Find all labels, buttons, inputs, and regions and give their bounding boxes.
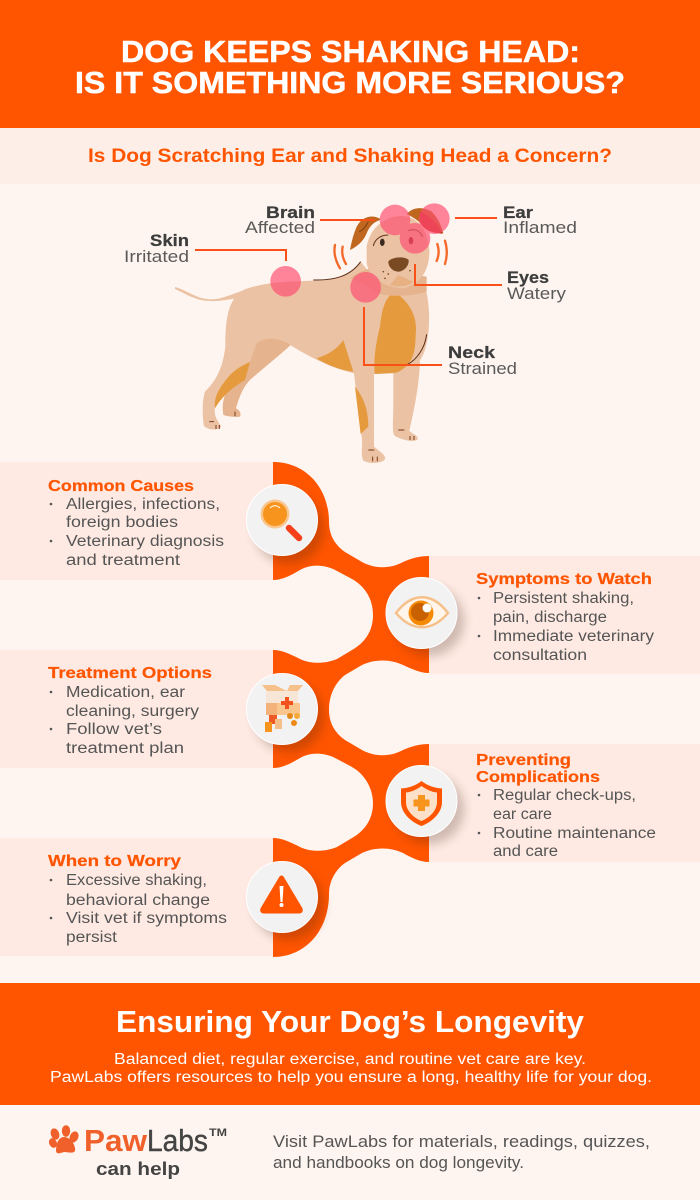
panel: treatment options: treatment plan [66, 740, 184, 757]
label: eyes: Eyes [507, 268, 549, 287]
label: brain: Brain [266, 203, 315, 222]
panel: common causes: Common Causes [48, 478, 194, 495]
panel: symptoms to watch: consultation [493, 647, 587, 664]
eyes, nose and brow details [209, 222, 427, 461]
label: skin: Irritated [124, 248, 189, 266]
closing banner [0, 983, 700, 1105]
label: skin: Skin [150, 231, 189, 250]
subheading band [0, 128, 700, 184]
panel: common causes: Allergies, infections, [66, 496, 220, 513]
icon: medicine box [246, 674, 318, 744]
call to action text: Visit PawLabs for materials, readings, quizzes, [273, 1133, 650, 1151]
highlight circles [270, 203, 450, 303]
icon shadows [254, 494, 464, 940]
icon: left ear [350, 216, 380, 250]
panel: common causes [0, 462, 274, 580]
title banner: IS IT SOMETHING MORE SERIOUS? [75, 66, 625, 100]
panel: preventing complications: Regular check-ups, [493, 787, 636, 804]
logo wordmark: Paw [84, 1123, 148, 1158]
inflamed inner ear [420, 212, 443, 234]
panel: when to worry: persist [66, 929, 118, 946]
logo wordmark: TM [209, 1127, 227, 1139]
icon: paw logo [47, 1125, 80, 1153]
panel: treatment options: Treatment Options [48, 665, 212, 682]
panel: symptoms to watch: Symptoms to Watch [476, 571, 652, 588]
label: neck: Strained [448, 360, 517, 378]
label: skin [124, 231, 189, 266]
label: eyes [507, 268, 567, 303]
icon: magnifying glass [246, 484, 318, 556]
label: neck: Neck [448, 343, 496, 362]
label: ear: Inflamed [503, 219, 577, 237]
panel: preventing complications: and care [493, 843, 558, 860]
logo wordmark: Labs [147, 1123, 208, 1158]
logo wordmark [84, 1123, 227, 1179]
flow connector [273, 462, 429, 957]
panel: when to worry: Excessive shaking, [66, 872, 207, 889]
panel: treatment options: Follow vet’s [66, 721, 162, 738]
closing banner: Ensuring Your Dog’s Longevity [116, 1004, 585, 1039]
title banner: DOG KEEPS SHAKING HEAD: [121, 35, 580, 69]
label: brain [245, 203, 315, 237]
panel: symptoms to watch [429, 556, 700, 674]
icon: eye [386, 578, 457, 648]
panel: symptoms to watch: Persistent shaking, [493, 590, 634, 607]
logo wordmark: can help [96, 1159, 180, 1179]
call to action text [273, 1133, 650, 1172]
label: ear: Ear [503, 203, 533, 222]
label: ear [503, 203, 577, 237]
icon: warning [246, 862, 318, 932]
panel: preventing complications: ear care [493, 806, 552, 823]
panel: common causes: Veterinary diagnosis [66, 533, 224, 550]
panel: treatment options: Medication, ear [66, 684, 185, 701]
panel: preventing complications [429, 744, 700, 862]
panel: symptoms to watch: pain, discharge [493, 609, 607, 626]
closing banner: Balanced diet, regular exercise, and routine vet care are key. [114, 1051, 586, 1068]
closing banner: PawLabs offers resources to help you ensure a long, healthy life for your dog. [50, 1069, 652, 1086]
subheading band: Is Dog Scratching Ear and Shaking Head a Concern? [88, 146, 612, 167]
shake motion marks [334, 241, 447, 268]
panel: common causes: foreign bodies [66, 514, 178, 531]
panel: treatment options [0, 650, 274, 768]
panel: preventing complications: Preventing [476, 752, 571, 769]
panel: preventing complications: Complications [476, 769, 600, 786]
dog illustration [175, 203, 450, 463]
panel: treatment options: cleaning, surgery [66, 703, 199, 720]
icon: right ear [407, 208, 443, 233]
label: brain: Affected [245, 219, 315, 237]
panel: when to worry: Visit vet if symptoms [66, 910, 227, 927]
label: eyes: Watery [507, 285, 567, 303]
panel: when to worry [0, 838, 274, 956]
title banner [0, 0, 700, 128]
panel: when to worry: behavioral change [66, 892, 210, 909]
panel: symptoms to watch: Immediate veterinary [493, 628, 654, 645]
icon: shield [386, 766, 457, 836]
label: neck [448, 343, 517, 378]
callout lines [195, 218, 502, 365]
call to action text: and handbooks on dog longevity. [273, 1154, 524, 1172]
panel: common causes: and treatment [66, 552, 181, 569]
panel: preventing complications: Routine maintenance [493, 825, 656, 842]
panel: when to worry: When to Worry [48, 853, 181, 870]
